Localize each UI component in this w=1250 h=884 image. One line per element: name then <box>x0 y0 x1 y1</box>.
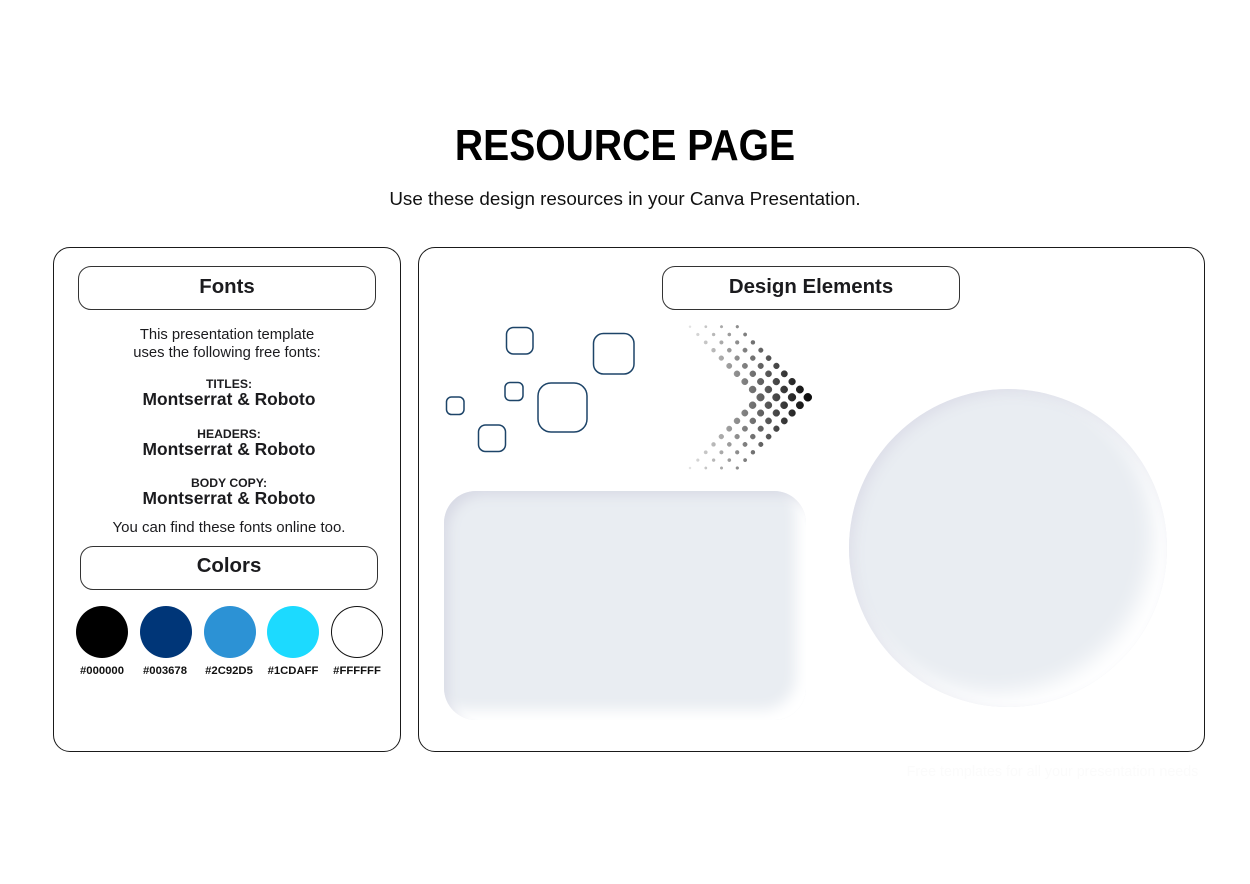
text: font intro: uses the following free fonts: <box>133 345 321 361</box>
text: font intro <box>133 327 321 361</box>
text: titles font: Montserrat & Roboto <box>143 389 315 409</box>
heading: design elements <box>662 266 960 310</box>
faint footer note: Free templates for all your presentation needs <box>907 764 1198 780</box>
text: titles font: TITLES: <box>206 377 252 391</box>
heading: fonts: Fonts <box>199 276 255 298</box>
text: headers font: HEADERS: <box>197 427 261 441</box>
label: black hex: #000000 <box>80 665 124 677</box>
text: headers font <box>143 427 315 459</box>
color swatch: black <box>76 606 128 658</box>
heading: design elements: Design Elements <box>729 276 893 298</box>
text: fonts note: You can find these fonts online too. <box>113 519 345 536</box>
decorative rounded squares <box>446 326 635 452</box>
color swatch: blue <box>204 606 256 658</box>
text: titles font <box>143 377 315 409</box>
label: white hex: #FFFFFF <box>333 665 381 677</box>
label: navy hex: #003678 <box>143 665 187 677</box>
panel: fonts and colors <box>53 247 401 752</box>
heading: fonts <box>78 266 376 310</box>
inset circle placeholder <box>849 389 1167 707</box>
panel: design elements <box>418 247 1205 752</box>
color swatch: cyan <box>267 606 319 658</box>
label: blue hex: #2C92D5 <box>205 665 253 677</box>
text: font intro: This presentation template <box>140 327 314 343</box>
color swatch: white <box>331 606 383 658</box>
halftone arrow <box>688 325 812 470</box>
text: body copy font: Montserrat & Roboto <box>143 488 315 508</box>
text: body copy font: BODY COPY: <box>191 476 267 490</box>
inset rounded rectangle placeholder <box>444 491 806 720</box>
heading: colors <box>80 546 378 590</box>
text: body copy font <box>143 476 315 508</box>
label: cyan hex: #1CDAFF <box>268 665 318 677</box>
color swatch: navy <box>140 606 192 658</box>
title: RESOURCE PAGE <box>455 121 795 170</box>
heading: colors: Colors <box>197 555 261 577</box>
text: headers font: Montserrat & Roboto <box>143 439 315 459</box>
subtitle: Use these design resources in your Canva Presentation. <box>389 188 861 209</box>
